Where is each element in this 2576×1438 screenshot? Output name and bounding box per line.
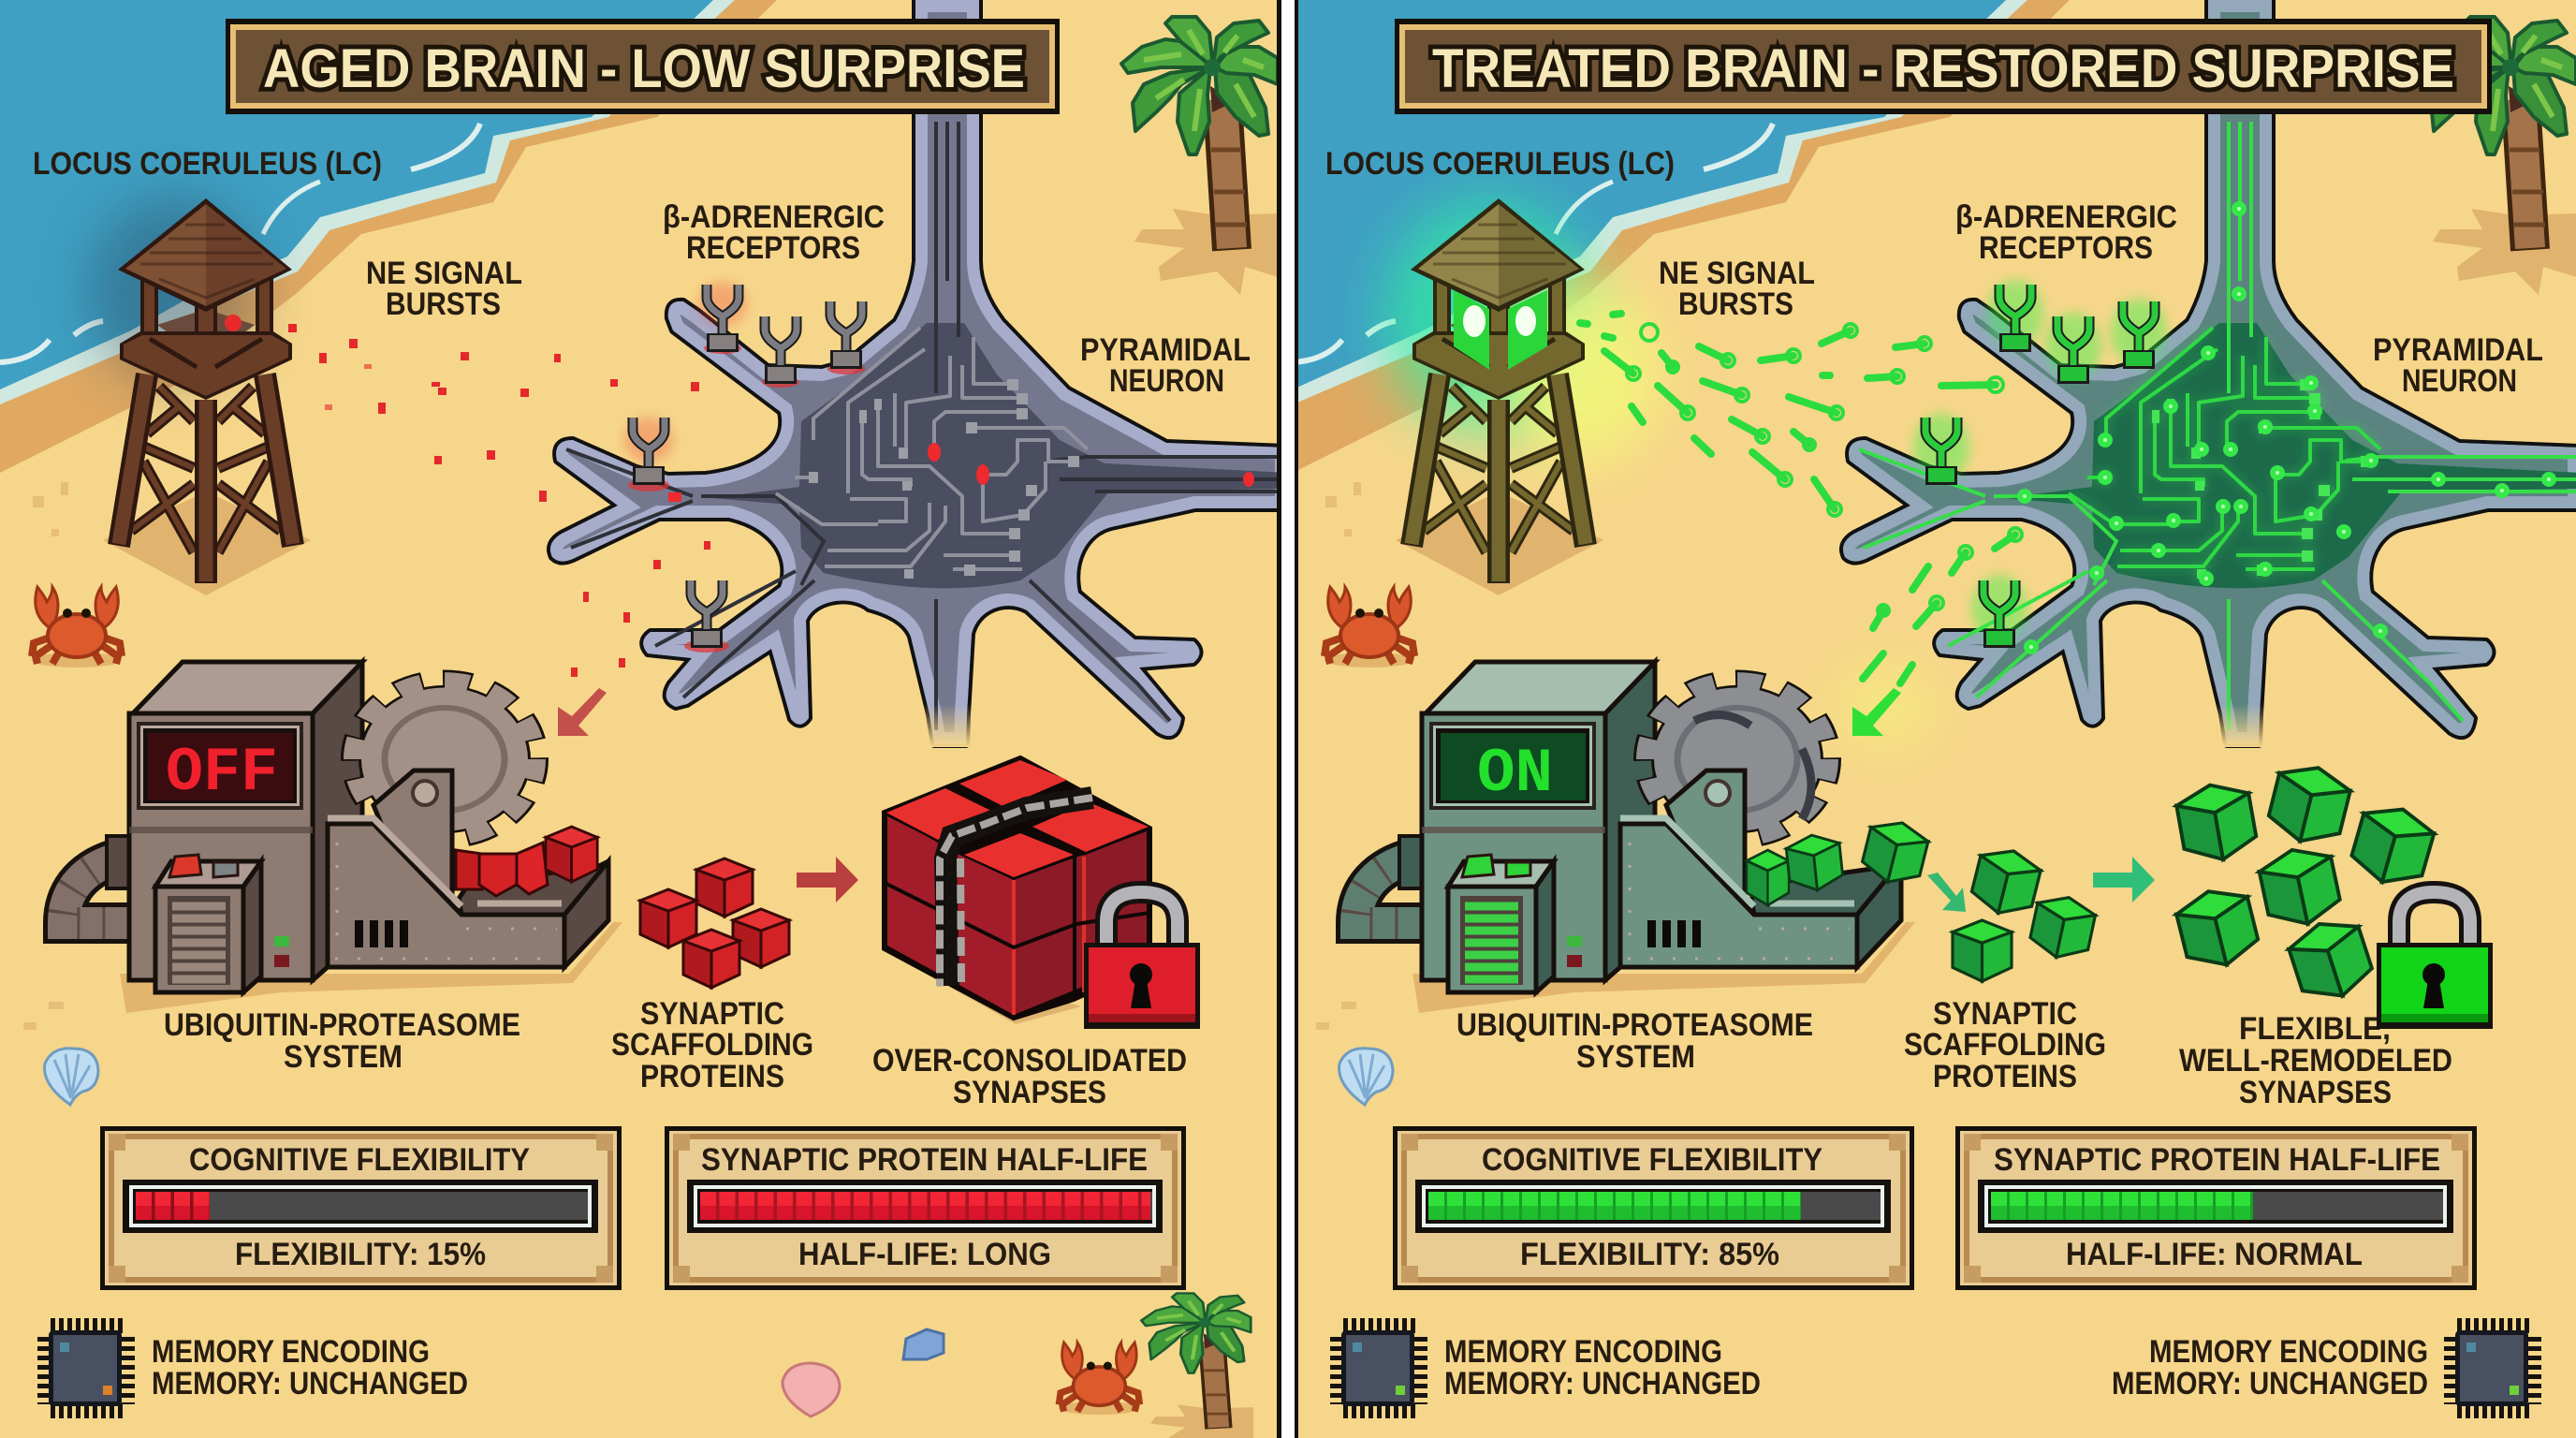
gear motion arrows (1694, 715, 1811, 819)
icon: green padlock (2377, 892, 2493, 1029)
pyramidal neuron (550, 0, 1287, 747)
labels: PROTEINS (640, 1059, 784, 1094)
labels: FLEXIBLE, (2239, 1011, 2391, 1047)
labels: PYRAMIDAL (1080, 332, 1251, 368)
labels: SYSTEM (1576, 1039, 1695, 1075)
labels (1325, 146, 2543, 1110)
labels: RECEPTORS (686, 230, 860, 266)
memory encoding: MEMORY ENCODING (152, 1334, 430, 1370)
stat: cognitive flexibility: FLEXIBILITY: 15% (235, 1237, 486, 1272)
labels: SYNAPTIC (1933, 996, 2077, 1032)
page divider (1277, 0, 1298, 1438)
icon: red padlock (1084, 892, 1200, 1029)
memory encoding: MEMORY: UNCHANGED (152, 1366, 468, 1401)
arrow: to synapses (797, 857, 858, 902)
arrow: machine to proteins (1927, 873, 1966, 912)
tower glow (1385, 201, 1933, 744)
title banner: AGED BRAIN - LOW SURPRISE (263, 38, 1025, 99)
stat: synaptic protein half-life (665, 1126, 1186, 1290)
stat: synaptic protein half-life: HALF-LIFE: NORMAL (2066, 1237, 2363, 1272)
signal particle heads (1627, 324, 2022, 616)
labels: PROTEINS (1933, 1059, 2077, 1094)
labels: β-ADRENERGIC (663, 199, 885, 235)
labels: UBIQUITIN-PROTEASOME (1456, 1007, 1813, 1043)
title banner (226, 19, 1060, 114)
memory encoding, left: MEMORY ENCODING (1444, 1334, 1722, 1370)
labels: BURSTS (1678, 286, 1793, 322)
sea and shoreline (1293, 0, 2070, 1030)
stat: cognitive flexibility (1393, 1126, 1914, 1290)
labels: OVER-CONSOLIDATED (872, 1043, 1187, 1078)
title banner (1395, 19, 2492, 114)
icon: palm tree (2420, 17, 2576, 295)
over-consolidated synapse block (885, 758, 1149, 1024)
labels: LOCUS COERULEUS (LC) (1325, 146, 1675, 182)
stat: synaptic protein half-life: SYNAPTIC PROTEIN HALF-LIFE (701, 1142, 1148, 1178)
ne signal particles (288, 324, 710, 677)
labels: SCAFFOLDING (1904, 1027, 2106, 1063)
labels: NE SIGNAL (1659, 256, 1815, 291)
icon: palm tree (1121, 17, 1281, 295)
labels: WELL-REMODELED (2179, 1043, 2452, 1078)
receptors (624, 282, 865, 653)
labels (33, 146, 1251, 1110)
stat: cognitive flexibility (100, 1126, 622, 1290)
labels: SYNAPSES (2239, 1075, 2392, 1110)
memory encoding, right: MEMORY ENCODING (2149, 1334, 2428, 1370)
belt cubes (456, 827, 597, 896)
tower shadow (89, 197, 257, 384)
labels: BURSTS (386, 286, 501, 322)
decor: crabs and shells (32, 587, 1140, 1416)
pyramidal neuron (1843, 0, 2576, 747)
stat: synaptic protein half-life: SYNAPTIC PROTEIN HALF-LIFE (1994, 1142, 2440, 1178)
memory encoding, right (2112, 1326, 2535, 1411)
labels: SYNAPTIC (640, 996, 784, 1032)
bottom palm (1141, 1293, 1253, 1438)
labels: LOCUS COERULEUS (LC) (33, 146, 382, 182)
status display: ON (1477, 739, 1553, 809)
labels: NEURON (1109, 363, 1224, 399)
stat: synaptic protein half-life (1955, 1126, 2477, 1290)
sea and shoreline (0, 0, 777, 1030)
memory encoding, right: MEMORY: UNCHANGED (2112, 1366, 2428, 1401)
stat: cognitive flexibility: COGNITIVE FLEXIBILITY (1482, 1142, 1822, 1178)
labels: NE SIGNAL (366, 256, 522, 291)
memory encoding, left: MEMORY: UNCHANGED (1444, 1366, 1761, 1401)
arrow: to synapses (2093, 857, 2155, 902)
ubiquitin-proteasome machine (1356, 662, 1931, 1013)
chain (945, 798, 1092, 986)
active neuron nodes (2020, 204, 2554, 652)
panel: aged brain (0, 0, 1287, 1438)
ubiquitin-proteasome machine (64, 662, 622, 1013)
memory encoding, left (1337, 1326, 1761, 1411)
panel: treated brain (1293, 0, 2576, 1438)
title banner: TREATED BRAIN - RESTORED SURPRISE (1432, 38, 2454, 99)
labels: β-ADRENERGIC (1955, 199, 2177, 235)
labels: UBIQUITIN-PROTEASOME (164, 1007, 520, 1043)
remodeled synapse cubes (2173, 759, 2438, 1007)
stat: cognitive flexibility: COGNITIVE FLEXIBILITY (189, 1142, 530, 1178)
status display: OFF (166, 738, 278, 808)
belt cubes (1747, 815, 1931, 905)
labels: PYRAMIDAL (2373, 332, 2543, 368)
labels: NEURON (2402, 363, 2517, 399)
signal tower (103, 198, 311, 595)
stat: cognitive flexibility: FLEXIBILITY: 85% (1520, 1237, 1779, 1272)
memory encoding (44, 1326, 468, 1411)
arrow: signal to proteasome (558, 688, 607, 736)
labels: SYNAPSES (953, 1075, 1106, 1110)
labels: RECEPTORS (1979, 230, 2153, 266)
decor: crab and shell (1325, 587, 1414, 1105)
labels: SCAFFOLDING (611, 1027, 813, 1063)
ne signal particles (1580, 314, 2015, 683)
stat: synaptic protein half-life: HALF-LIFE: LONG (798, 1237, 1051, 1272)
signal tower (1396, 198, 1603, 595)
receptors (1913, 280, 2167, 648)
synaptic scaffolding cubes (640, 858, 789, 988)
arrow: signal to proteasome (1852, 688, 1901, 736)
labels: SYSTEM (284, 1039, 402, 1075)
synaptic scaffolding cubes (1953, 844, 2098, 981)
